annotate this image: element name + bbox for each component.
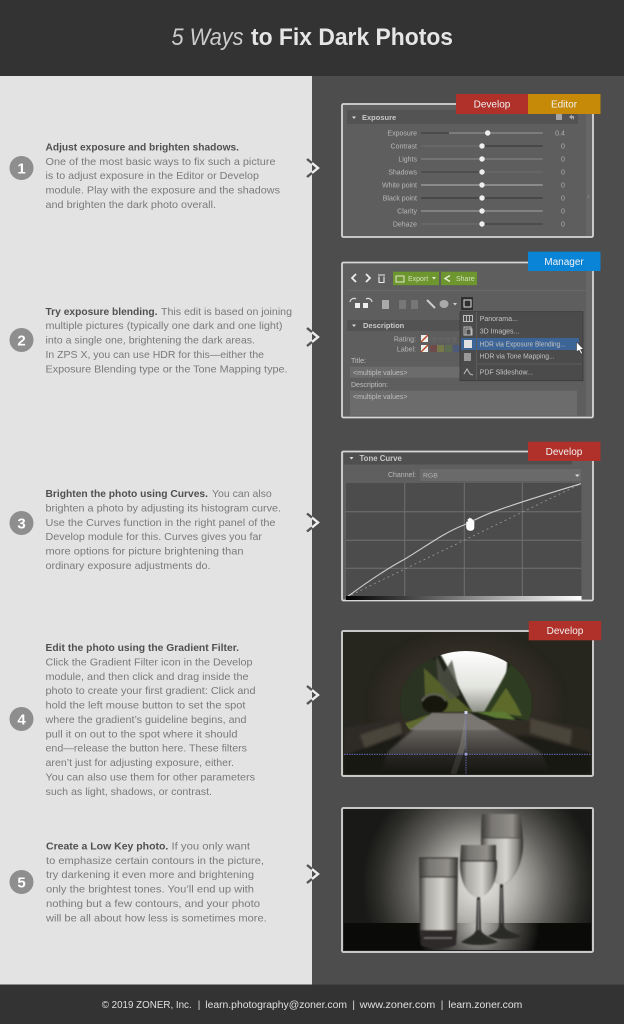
dropdown menu: HDR via Exposure Blending...: [480, 341, 566, 348]
gradient guide lines: [344, 711, 591, 774]
description field: [350, 382, 577, 416]
panel: tunnel photo with gradient filter: [342, 621, 601, 776]
step 3 arrow: [307, 514, 318, 532]
step 5 text: to emphasize certain contours in the picture,: [46, 855, 264, 867]
step 4 text: Click the Gradient Filter icon in the Develop: [46, 656, 253, 668]
step 1 arrow: [307, 159, 318, 177]
rating and label rows: ☆☆☆☆: [431, 335, 458, 344]
step 5 arrow: [307, 865, 318, 883]
rating and label rows: Rating:: [394, 336, 416, 344]
step 4 text: pull it on out to the spot where it should: [46, 728, 238, 740]
dropdown menu: PDF Slideshow...: [480, 370, 533, 377]
step 4 text: photo to create your first gradient: Click and: [46, 685, 256, 697]
middle wine glass: [460, 845, 498, 945]
slider rows: 0: [561, 156, 565, 164]
step 5 text: only the brightest tones. You’ll end up with: [46, 884, 254, 896]
step 4 text: You can also use them for other parameters: [46, 771, 255, 783]
title: [172, 24, 453, 51]
slider rows: Shadows: [388, 170, 417, 176]
tag: Manager: [528, 252, 600, 271]
tag: Editor: [528, 94, 600, 114]
curve graph: [346, 483, 582, 600]
panel: tone curve screenshot: RGB: [423, 472, 438, 480]
step 1 number badge: [10, 156, 34, 180]
step 1 text: [46, 142, 280, 211]
step 4 text: module, and then click and drag inside the: [46, 671, 249, 683]
dropdown menu: Panorama...: [480, 316, 518, 323]
title field: Title:: [351, 358, 366, 365]
step 5 text: try darkening it even more and brightening: [46, 869, 254, 881]
panel: manager HDR menu screenshot: [342, 252, 600, 418]
step 5 text: will be all about how less is sometimes more.: [45, 912, 267, 924]
tunnel photo: [344, 646, 591, 774]
footer text: learn.zoner.com: [448, 1000, 522, 1011]
step 1 text: module. Play with the exposure and the shadows: [46, 185, 280, 197]
step 4 arrow: [307, 686, 318, 704]
title: 5 Ways: [172, 24, 244, 51]
tag: Develop: [528, 442, 600, 461]
export button: [393, 272, 439, 285]
export button: Export: [408, 276, 428, 283]
description header: [347, 320, 460, 331]
glasses photo: [344, 809, 591, 950]
step 4 text: Edit the photo using the Gradient Filter.: [46, 642, 239, 654]
light left column: [0, 76, 312, 985]
step 3 text: Develop module for this. Curves gives you far: [46, 531, 263, 543]
panel: exposure sliders screenshot: Exposure: [362, 113, 396, 122]
footer text: |: [352, 1000, 355, 1011]
rating and label rows: [394, 335, 460, 354]
step 3 text: more options for picture brightening than: [46, 546, 244, 558]
description header: Description: [363, 321, 405, 330]
tag: Develop: [456, 94, 528, 114]
step 5 text: If you only want: [172, 840, 250, 852]
step 5 number badge: [10, 870, 34, 894]
share button: [441, 272, 477, 285]
title field: [350, 358, 462, 378]
panel: low key glasses photo: [342, 808, 593, 952]
tag: Manager: Manager: [544, 257, 584, 268]
tag: Develop: Develop: [474, 100, 511, 110]
slider rows: Exposure: [387, 130, 417, 138]
step 2 number badge: [10, 328, 34, 352]
title: to Fix Dark Photos: [251, 24, 453, 51]
dropdown menu: 3D Images...: [480, 328, 519, 336]
step 1 text: and brighten the dark photo overall.: [46, 199, 216, 211]
footer text: |: [441, 1000, 443, 1011]
step 5 text: [45, 840, 267, 924]
slider rows: Contrast: [391, 144, 417, 150]
dark right column: [312, 76, 624, 985]
slider rows: Lights: [398, 156, 417, 164]
footer text: learn.photography@zoner.com: [205, 1000, 347, 1011]
slider rows: 0: [561, 222, 565, 228]
step 3 text: ordinary exposure adjustments do.: [46, 560, 211, 572]
rating and label rows: Label:: [397, 346, 416, 354]
step 2 arrow: [307, 328, 318, 346]
step 4 text: such as light, shadows, or contrast.: [46, 786, 212, 798]
mouse cursor: [576, 342, 584, 354]
tag: Develop: Develop: [546, 447, 583, 458]
panel: tone curve screenshot: [342, 442, 600, 600]
step 5 text: nothing but a few contours, and your photo: [46, 898, 260, 910]
step 2 number badge: 2: [17, 332, 26, 349]
tumbler glass: [419, 858, 458, 949]
footer text: www.zoner.com: [359, 1000, 435, 1011]
step 4 number badge: 4: [17, 711, 26, 728]
footer band: [0, 984, 624, 1024]
step 1 text: is to adjust exposure in the Editor or Develop: [46, 170, 259, 182]
step 2 text: multiple pictures (typically one dark and one light): [46, 320, 282, 332]
tag: Editor: Editor: [551, 100, 578, 110]
navigation icons: [352, 274, 385, 282]
step 1 text: One of the most basic ways to fix such a picture: [46, 156, 276, 168]
tall wine glass: [481, 814, 523, 939]
step 4 number badge: [10, 707, 34, 731]
step 5 text: Create a Low Key photo.: [46, 840, 168, 852]
step 1 text: Adjust exposure and brighten shadows.: [46, 142, 239, 154]
step 3 text: You can also: [212, 488, 272, 500]
step 2 text: This edit is based on joining: [161, 306, 292, 318]
description field: <multiple values>: [353, 394, 407, 401]
step 2 text: [46, 306, 292, 375]
step 2 text: In ZPS X, you can use HDR for this—either the: [46, 349, 264, 361]
slider rows: [382, 130, 565, 228]
dropdown menu: [460, 312, 583, 381]
step 4 text: [44, 642, 256, 798]
slider rows: 0: [561, 182, 565, 190]
step 3 text: Use the Curves function in the right panel of the: [46, 517, 276, 529]
step 5 number badge: 5: [17, 874, 26, 891]
step 3 text: brighten a photo by adjusting its histogram curve.: [46, 502, 281, 514]
toolbar icons: [350, 297, 473, 310]
slider rows: 0: [561, 208, 565, 216]
step 4 text: end—release the button here. These filters: [46, 743, 247, 755]
tag: Develop: Develop: [547, 626, 584, 637]
step 1 number badge: 1: [17, 160, 26, 177]
slider rows: Clarity: [397, 208, 417, 216]
step 4 text: hold the left mouse button to set the spot: [46, 700, 246, 712]
footer text: © 2019 ZONER, Inc.: [102, 1000, 192, 1011]
slider rows: Black point: [383, 196, 417, 202]
panel: tone curve screenshot: Tone Curve: [360, 454, 402, 463]
panel: tone curve screenshot: Channel:: [388, 472, 416, 479]
step 3 number badge: [10, 511, 34, 535]
dropdown menu: HDR via Tone Mapping...: [480, 354, 555, 361]
panel: exposure sliders screenshot: [342, 94, 600, 237]
description field: Description:: [351, 382, 388, 389]
slider rows: 0: [561, 196, 565, 202]
slider rows: 0: [561, 144, 565, 150]
step 4 text: aren’t just for adjusting exposure, either.: [46, 757, 234, 769]
header band: [0, 0, 624, 76]
footer text: |: [198, 1000, 200, 1011]
step 3 text: Brighten the photo using Curves.: [46, 488, 208, 500]
footer text: [102, 1000, 522, 1011]
slider rows: 0: [561, 170, 565, 176]
slider rows: 0.4: [555, 130, 565, 138]
hand cursor: [466, 518, 474, 531]
step 2 text: into a single one, brightening the dark areas.: [46, 335, 255, 347]
slider rows: Dehaze: [393, 222, 417, 228]
step 2 text: Try exposure blending.: [46, 306, 158, 318]
slider rows: White point: [382, 182, 417, 190]
title field: <multiple values>: [353, 370, 407, 377]
share button: Share: [456, 276, 475, 283]
step 3 number badge: 3: [17, 515, 26, 532]
tag: Develop: [529, 621, 601, 640]
step 4 text: where the gradient’s guideline begins, and: [44, 714, 247, 726]
step 3 text: [46, 488, 281, 572]
step 2 text: Exposure Blending type or the Tone Mapping type.: [46, 363, 288, 375]
